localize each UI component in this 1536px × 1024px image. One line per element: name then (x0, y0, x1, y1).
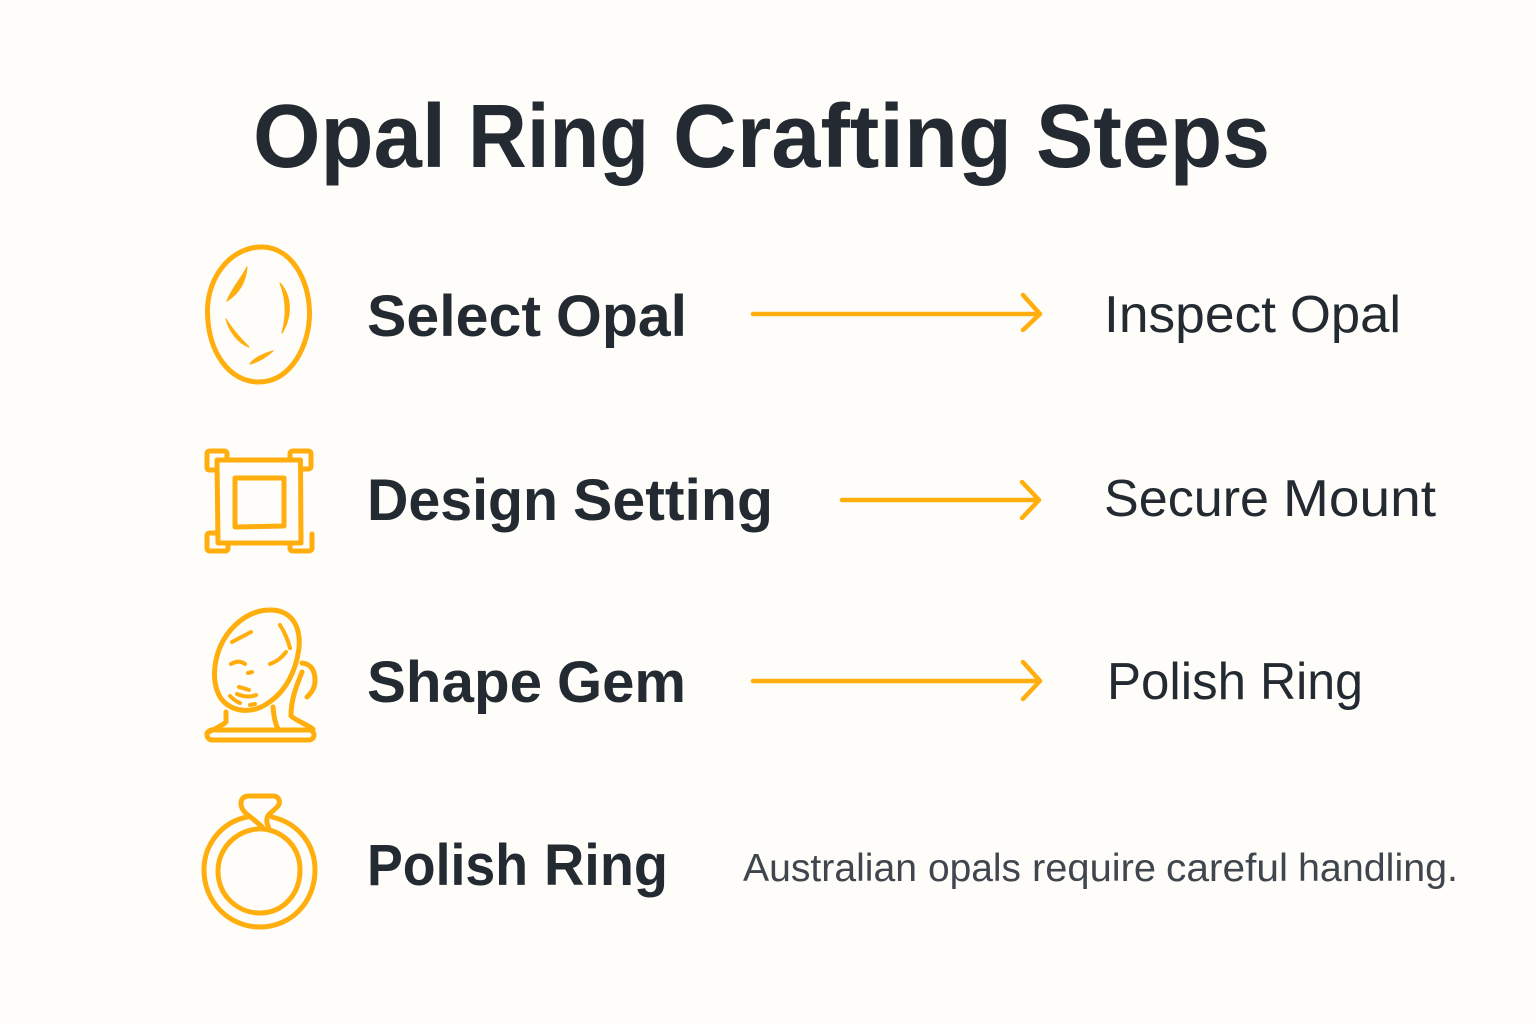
outcome: secure mount (1104, 470, 1437, 528)
icon: raw opal (207, 247, 310, 382)
outcome: inspect opal: Inspect (1104, 286, 1277, 344)
title: Opal (253, 87, 446, 187)
note: handling: handling. (1298, 847, 1458, 890)
outcome: secure mount: Secure (1104, 470, 1269, 528)
outcome: polish ring: Ring (1260, 653, 1363, 711)
step label: design setting: Design (367, 468, 558, 533)
note: handling: require (1032, 847, 1156, 890)
step label: shape gem (367, 650, 686, 715)
outcome: secure mount: Mount (1283, 470, 1437, 528)
step label: select opal: Opal (556, 284, 687, 349)
title: Crafting (673, 87, 1012, 187)
title: Ring (468, 87, 649, 187)
note: handling (743, 847, 1458, 890)
outcome: inspect opal (1104, 286, 1401, 344)
outcome: polish ring (1107, 653, 1363, 711)
note: handling: Australian (743, 847, 917, 890)
note: handling: careful (1166, 847, 1288, 890)
note: handling: opals (928, 847, 1021, 890)
step label: polish ring: Polish (367, 833, 528, 898)
step label: polish ring: Ring (544, 833, 668, 898)
step row: design setting (207, 451, 1437, 551)
icon: ring (204, 796, 315, 927)
icon: gem on stand (207, 610, 315, 740)
step label: polish ring (367, 833, 668, 898)
step label: shape gem: Gem (557, 650, 686, 715)
step label: select opal (367, 284, 687, 349)
title (253, 87, 1270, 187)
outcome: inspect opal: Opal (1290, 286, 1401, 344)
step row: select opal (207, 247, 1401, 382)
arrow: design setting to secure mount (842, 482, 1039, 518)
arrow: shape gem to polish ring (753, 662, 1040, 699)
outcome: polish ring: Polish (1107, 653, 1246, 711)
arrow: select opal to inspect opal (753, 295, 1040, 330)
step row: shape gem (207, 610, 1363, 740)
step label: design setting (367, 468, 773, 533)
step label: shape gem: Shape (367, 650, 542, 715)
step label: select opal: Select (367, 284, 541, 349)
step label: design setting: Setting (573, 468, 773, 533)
icon: square setting (207, 451, 312, 551)
title: Steps (1036, 87, 1270, 187)
step row: polish ring (204, 796, 1458, 927)
